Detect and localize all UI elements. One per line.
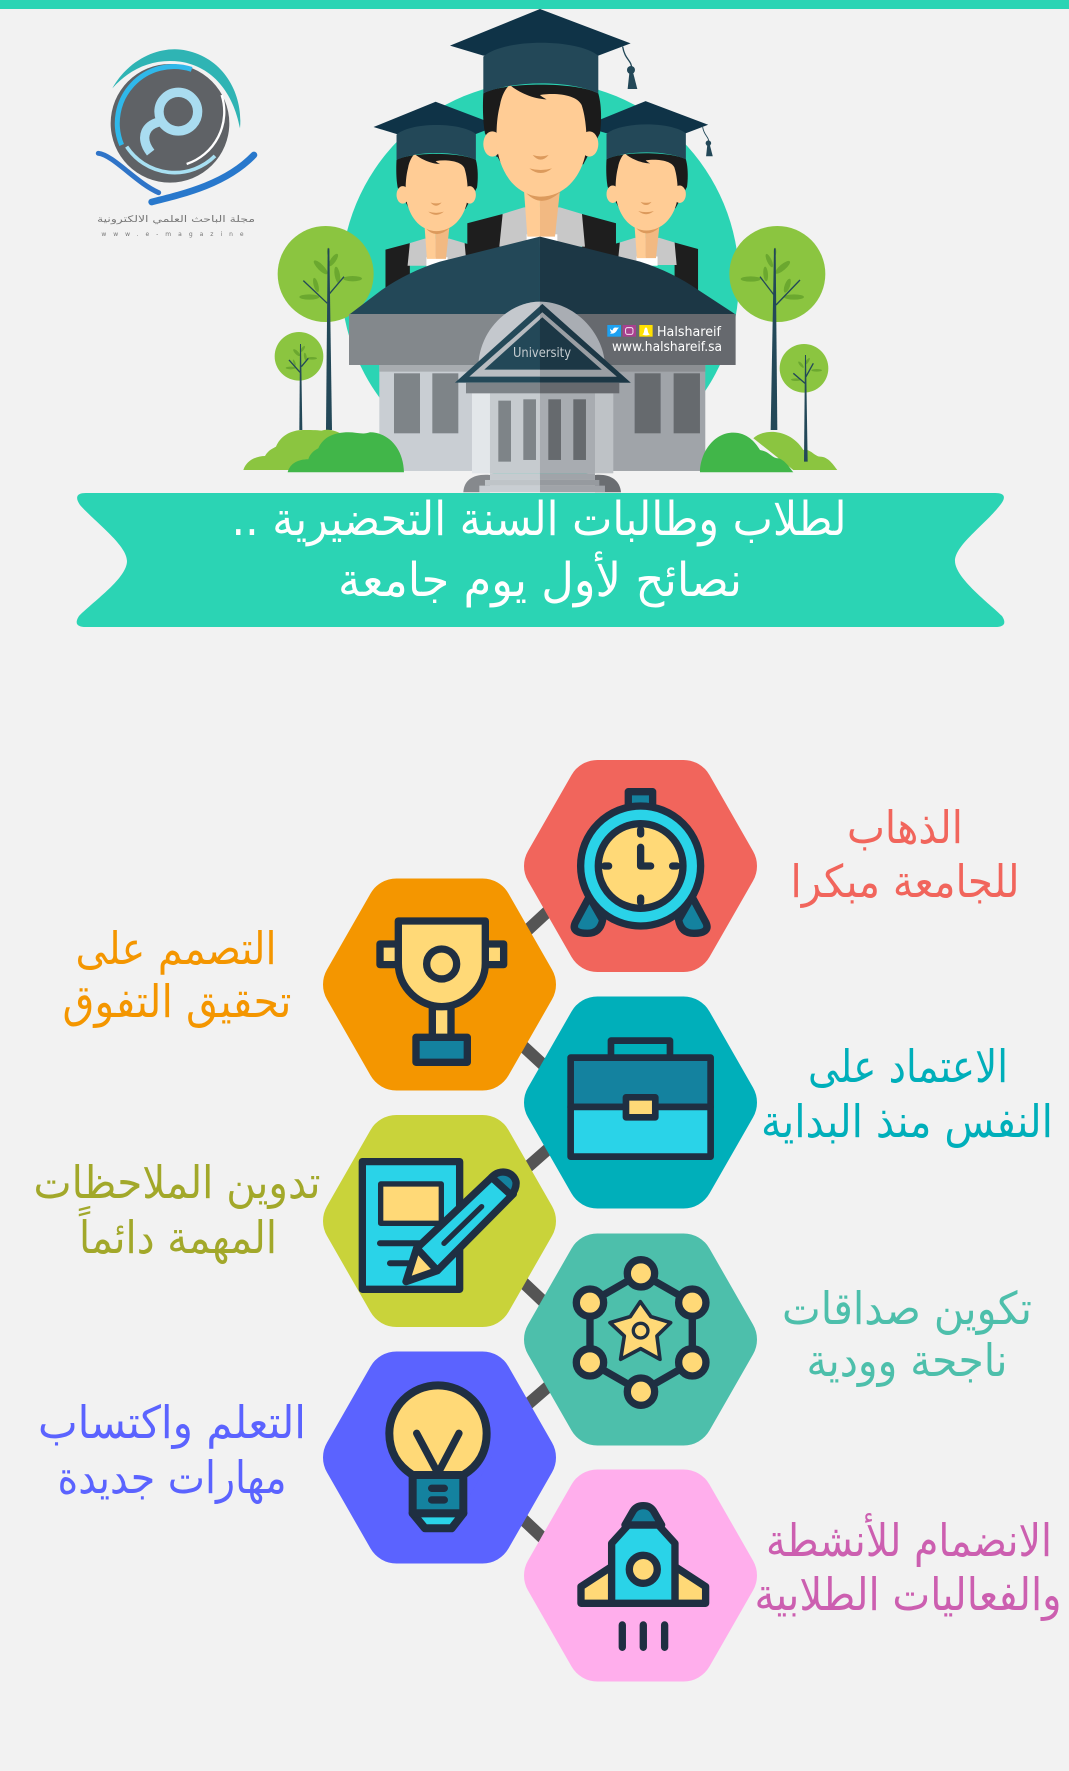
label: determination	[62, 922, 292, 1028]
left bushes	[243, 430, 404, 472]
icon: notepad and pencil	[362, 1162, 516, 1289]
label: go early	[790, 801, 1020, 908]
pediment	[455, 304, 631, 393]
hexagon: alarm clock	[554, 790, 727, 942]
icon: star network	[576, 1260, 706, 1405]
label: learning: مهارات جديدة	[58, 1451, 286, 1504]
label: friendships: ناجحة وودية	[806, 1334, 1008, 1388]
building label: University	[513, 346, 571, 361]
steps	[463, 473, 621, 492]
label: determination: تحقيق التفوق	[62, 975, 292, 1028]
left trees	[275, 226, 374, 430]
label: activities	[754, 1512, 1062, 1622]
label: friendships: تكوين صداقات	[782, 1282, 1032, 1335]
icon: briefcase	[571, 1041, 711, 1157]
facade band	[349, 314, 736, 365]
watermark text	[612, 325, 722, 355]
title line 2: نصائح لأول يوم جامعة	[338, 550, 742, 608]
right trees	[729, 226, 828, 430]
icon: clock	[574, 792, 707, 933]
label: go early: للجامعة مبكرا	[790, 855, 1020, 908]
teal circle backdrop	[341, 81, 739, 479]
label: self reliance: الاعتماد على	[808, 1040, 1008, 1093]
hexagon: trophy	[353, 908, 526, 1062]
roof	[350, 237, 735, 314]
label: self reliance	[761, 1040, 1053, 1148]
left student	[374, 102, 503, 301]
right bushes	[700, 355, 837, 472]
right student	[584, 101, 713, 301]
title banner	[77, 492, 1004, 627]
label: taking notes	[34, 1156, 320, 1264]
hexagon: notes	[353, 1145, 526, 1297]
entrance	[472, 393, 613, 473]
watermark text: Halshareif	[657, 325, 721, 340]
icon: rocket	[581, 1506, 706, 1647]
title line 1: لطلاب وطالبات السنة التحضيرية ..	[232, 492, 846, 547]
watermark text: www.halshareif.sa	[612, 340, 722, 355]
logo caption	[97, 215, 255, 238]
connectors	[505, 889, 572, 1559]
label: learning: التعلم واكتساب	[38, 1396, 306, 1450]
logo	[98, 49, 254, 202]
label: taking notes: المهمة دائماً	[78, 1205, 277, 1264]
label: taking notes: تدوين الملاحظات	[34, 1156, 320, 1210]
walls	[379, 365, 705, 471]
label: go early: الذهاب	[847, 801, 963, 854]
arch	[478, 302, 605, 365]
logo caption: مجلة الباحث العلمي الالكترونية	[97, 215, 255, 225]
center student	[450, 9, 637, 298]
hexagon: friendship network	[554, 1260, 727, 1416]
top bar	[0, 0, 1069, 9]
hexagon: light bulb	[353, 1382, 526, 1534]
label: learning	[38, 1396, 306, 1504]
hexagon: rocket	[554, 1500, 727, 1652]
logo caption: www.e-magazine	[101, 231, 251, 238]
social icons	[607, 325, 653, 337]
label: determination: التصمم على	[76, 922, 276, 975]
icon: trophy	[380, 921, 504, 1062]
label: friendships	[782, 1282, 1032, 1388]
university building	[349, 237, 736, 492]
icon: light bulb	[389, 1385, 487, 1528]
hexagon: briefcase	[554, 1026, 727, 1178]
windows	[394, 373, 700, 433]
